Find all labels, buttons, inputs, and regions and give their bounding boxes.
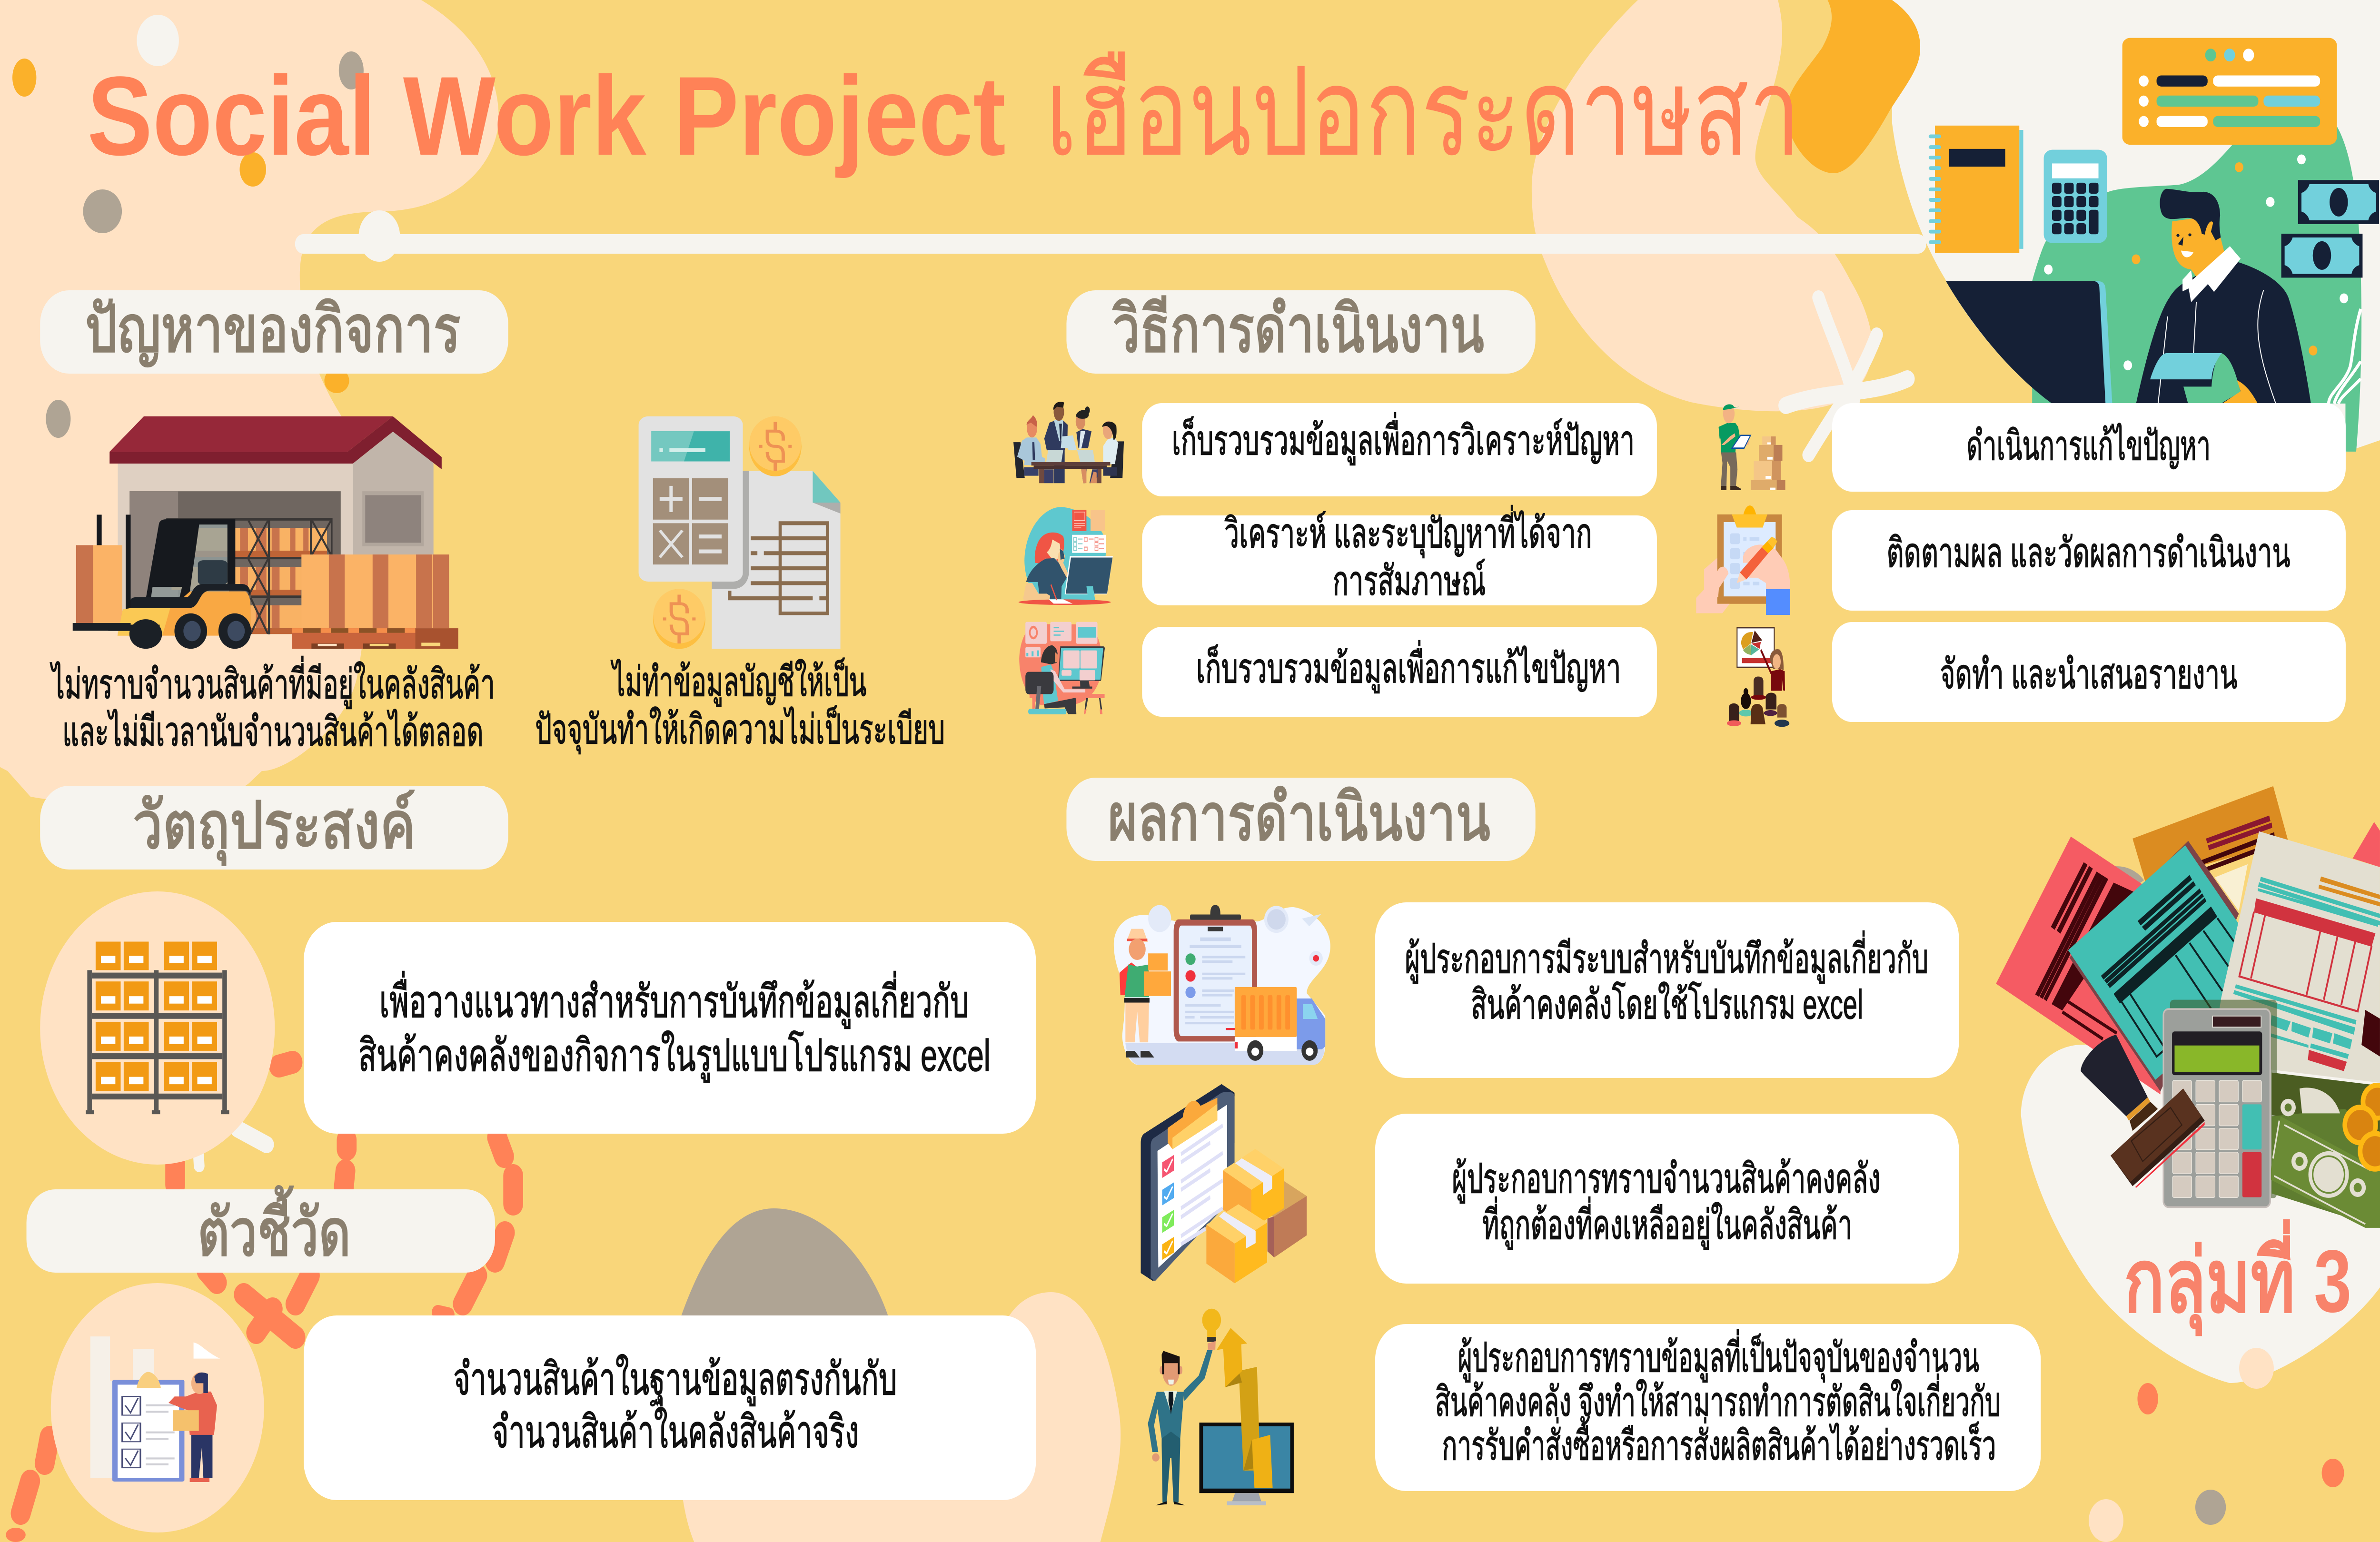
text box: result 3 xyxy=(1375,1324,2041,1491)
icon: checklist and boxes xyxy=(1141,1084,1307,1283)
title xyxy=(87,44,1801,181)
icon: presenter and audience xyxy=(1727,628,1789,727)
heading: indicators: ตัวชี้วัด xyxy=(198,1186,351,1270)
panel: indicators xyxy=(27,1186,1036,1532)
panel: objective xyxy=(40,786,1036,1165)
heading: results: ผลการดำเนินงาน xyxy=(1108,781,1490,854)
text box: result 2: ผู้ประกอบการทราบจำนวนสินค้าคงคลัง xyxy=(1452,1156,1881,1203)
text: problem 2: ไม่ทำข้อมูลบัญชีให้เป็น xyxy=(610,658,866,706)
step box: analyse and identify problems: วิเคราะห์ และระบุปัญหาที่ได้จาก xyxy=(1224,505,1592,558)
text: problem 2 xyxy=(535,658,945,754)
icon: worker with boxes xyxy=(1719,404,1785,490)
text box: indicators: จำนวนสินค้าในฐานข้อมูลตรงกันกับ xyxy=(453,1354,897,1407)
text: problem 2: ปัจจุบันทำให้เกิดความไม่เป็นระเบียบ xyxy=(535,705,945,754)
step box: collect data for solving: เก็บรวบรวมข้อมูลเพื่อการแก้ไขปัญหา xyxy=(1196,640,1621,693)
text box: objective xyxy=(304,922,1036,1134)
title: Social Work Project xyxy=(87,53,1006,178)
step box: report and present: จัดทำ และนำเสนอรายงาน xyxy=(1940,652,2238,697)
text box: result 1 xyxy=(1375,902,1959,1078)
step box: report and present xyxy=(1832,622,2346,722)
step box: implement the fix xyxy=(1832,403,2346,492)
heading: business problems: ปัญหาของกิจการ xyxy=(85,293,461,367)
group label: กลุ่มที่ 3 xyxy=(2124,1219,2351,1336)
decoration: white star strokes xyxy=(198,297,1907,1166)
step box: monitor and measure xyxy=(1832,510,2346,611)
title: เฮือนปอกระดาษสา xyxy=(1045,44,1801,181)
man xyxy=(2136,189,2311,404)
text box: indicators xyxy=(304,1315,1036,1500)
text box: result 3: สินค้าคงคลัง จึงทำให้สามารถทำการตัดสินใจเกี่ยวกับ xyxy=(1435,1374,2001,1425)
icon: storage rack in circle xyxy=(40,891,275,1165)
heading: methods: วิธีการดำเนินงาน xyxy=(1112,293,1484,366)
icon: woman at computer xyxy=(1019,622,1105,714)
panel: methods xyxy=(1013,290,2346,727)
text box: indicators: จำนวนสินค้าในคลังสินค้าจริง xyxy=(492,1407,859,1457)
calculator xyxy=(2044,150,2107,243)
text: problem 1: และไม่มีเวลานับจำนวนสินค้าได้ตลอด xyxy=(62,709,484,755)
title underline bar xyxy=(295,210,1926,262)
text box: objective: เพื่อวางแนวทางสำหรับการบันทึกข้อมูลเกี่ยวกับ xyxy=(379,971,969,1029)
panel: results xyxy=(1066,778,2041,1505)
illustration: documents, calculator, stamp and money xyxy=(1996,786,2380,1228)
icon: hands writing on clipboard xyxy=(1696,505,1790,615)
decoration: dashed orange trail xyxy=(20,1062,513,1513)
text box: objective: สินค้าคงคลังของกิจการในรูปแบบโปรแกรม excel xyxy=(358,1030,991,1083)
icon: team meeting xyxy=(1013,402,1124,483)
step box: collect data for analysis xyxy=(1142,403,1657,496)
text box: result 2: ที่ถูกต้องที่คงเหลืออยู่ในคลังสินค้า xyxy=(1482,1196,1852,1249)
text box: result 1: สินค้าคงคลังโดยใช้โปรแกรม excel xyxy=(1471,981,1863,1028)
decoration: bottom-left trail end xyxy=(6,1528,26,1542)
info card xyxy=(2122,38,2337,145)
heading: objective: วัตถุประสงค์ xyxy=(133,789,416,866)
icon: delivery truck and clipboard xyxy=(1114,905,1330,1065)
text box: result 3: การรับคำสั่งซื้อหรือการสั่งผลิตสินค้าได้อย่างรวดเร็ว xyxy=(1442,1416,1996,1469)
icon: checklist person in circle xyxy=(51,1283,264,1532)
dots on green xyxy=(2044,154,2361,404)
step box: collect data for analysis: เก็บรวบรวมข้อมูลเพื่อการวิเคราะห์ปัญหา xyxy=(1172,412,1635,465)
icon: woman on phone xyxy=(1019,507,1113,605)
illustration: warehouse and forklift xyxy=(73,416,458,649)
illustration: accountant at desk xyxy=(1931,38,2379,452)
monitor xyxy=(1946,281,2112,404)
heading: objective xyxy=(40,786,508,870)
step box: implement the fix: ดำเนินการแก้ไขปัญหา xyxy=(1966,423,2211,469)
step box: collect data for solving xyxy=(1142,627,1657,717)
icon: businessman with idea and rising arrow xyxy=(1148,1309,1294,1505)
text box: result 2 xyxy=(1375,1114,1959,1284)
text box: result 3: ผู้ประกอบการทราบข้อมูลที่เป็นปัจจุบันของจำนวน xyxy=(1458,1329,1979,1382)
text: problem 1: ไม่ทราบจำนวนสินค้าที่มีอยู่ในคลังสินค้า xyxy=(50,656,495,709)
step box: analyse and identify problems: การสัมภาษณ์ xyxy=(1332,558,1486,604)
text: problem 1 xyxy=(50,656,495,755)
heading: indicators xyxy=(27,1186,495,1273)
step box: analyse and identify problems xyxy=(1142,505,1657,605)
notebook xyxy=(1931,126,2023,253)
panel: business problems xyxy=(40,290,945,755)
illustration: calculator, coins and ledger xyxy=(639,416,841,649)
text box: result 1: ผู้ประกอบการมีระบบสำหรับบันทึกข้อมูลเกี่ยวกับ xyxy=(1405,930,1928,983)
banknotes xyxy=(2281,180,2379,277)
